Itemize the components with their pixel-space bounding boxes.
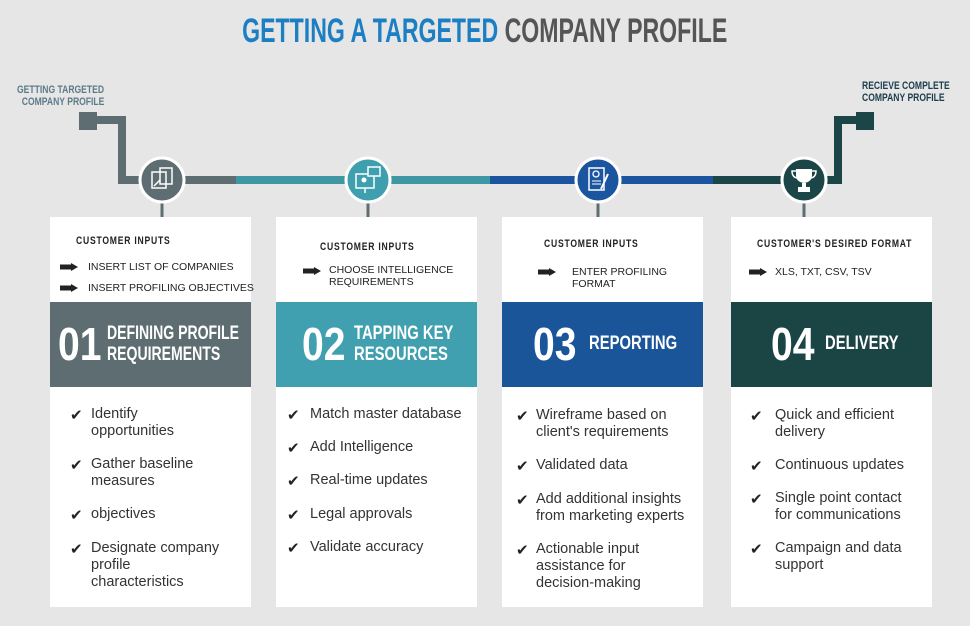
timeline xyxy=(79,112,874,217)
card 1 bullets: ✔ xyxy=(70,541,83,558)
card 2 bullets: Real-time updates xyxy=(310,472,428,488)
card 4 band: 04 xyxy=(771,318,814,370)
card 1 bullets: Designate company xyxy=(91,540,219,556)
card 3 bullets: decision-making xyxy=(536,575,641,591)
card 1 input items xyxy=(60,261,254,294)
panel: card 2 xyxy=(276,217,477,607)
card 2 bullets: Add Intelligence xyxy=(310,439,413,455)
card 4 format item: XLS, TXT, CSV, TSV xyxy=(775,266,872,278)
card 2 bullets xyxy=(287,406,462,557)
card 1 bullets: opportunities xyxy=(91,423,174,439)
card 3 bullets: Wireframe based on xyxy=(536,407,667,423)
panel: card 4 xyxy=(731,217,932,607)
card 3 band xyxy=(502,302,703,387)
title: GETTING A TARGETED COMPANY PROFILE xyxy=(242,12,728,50)
card 4 bullets xyxy=(750,407,904,573)
card 4 bullets: Campaign and data xyxy=(775,540,902,556)
card 4 bullets: ✔ xyxy=(750,408,763,425)
card 1 bullets: ✔ xyxy=(70,507,83,524)
card 1 input items: INSERT PROFILING OBJECTIVES xyxy=(88,282,254,294)
card 3 inputs title: CUSTOMER INPUTS xyxy=(544,238,638,250)
panel: card 3 xyxy=(502,217,703,607)
card 2 band: TAPPING KEY xyxy=(354,323,453,344)
card 3 bullets: ✔ xyxy=(516,458,529,475)
icon: step 4 trophy xyxy=(780,156,828,204)
card 4 bullets: Continuous updates xyxy=(775,457,904,473)
card 4 bullets: support xyxy=(775,557,823,573)
card 2 input item: REQUIREMENTS xyxy=(329,276,414,288)
panel: card 1 xyxy=(50,217,251,607)
end label: COMPANY PROFILE xyxy=(862,92,945,104)
card 4 bullets: Single point contact xyxy=(775,490,902,506)
card 4 bullets: ✔ xyxy=(750,458,763,475)
card 3 bullets: ✔ xyxy=(516,492,529,509)
card 4 format title: CUSTOMER'S DESIRED FORMAT xyxy=(757,238,912,250)
card 1 inputs title: CUSTOMER INPUTS xyxy=(76,235,170,247)
icon: step 1 xyxy=(138,156,186,204)
card 4 bullets: Quick and efficient xyxy=(775,407,894,423)
card 1 bullets: ✔ xyxy=(70,407,83,424)
start label xyxy=(17,84,104,108)
start label: GETTING TARGETED xyxy=(17,84,104,96)
card 3 bullets: ✔ xyxy=(516,542,529,559)
card 1 bullets: objectives xyxy=(91,506,155,522)
card 3 bullets: Validated data xyxy=(536,457,628,473)
card 1 input items: INSERT LIST OF COMPANIES xyxy=(88,261,234,273)
card 2 bullets: Validate accuracy xyxy=(310,539,423,555)
card 3 input item: FORMAT xyxy=(572,278,616,290)
end label xyxy=(862,80,950,104)
start label: COMPANY PROFILE xyxy=(22,96,104,108)
card 4 band: DELIVERY xyxy=(825,333,899,354)
end label: RECIEVE COMPLETE xyxy=(862,80,950,92)
card 2 band xyxy=(276,302,477,387)
icon: step 2 xyxy=(344,156,392,204)
card 3 input item: ENTER PROFILING xyxy=(572,266,667,278)
card 3 bullets: client's requirements xyxy=(536,424,669,440)
card 1 bullets: profile xyxy=(91,557,130,573)
card 3 band: 03 xyxy=(533,318,576,370)
card 1 bullets: measures xyxy=(91,473,155,489)
icon: step 3 xyxy=(574,156,622,204)
card 4 bullets: delivery xyxy=(775,424,825,440)
card 3 input item xyxy=(538,266,667,290)
card 2 bullets: ✔ xyxy=(287,407,300,424)
card 3 bullets: from marketing experts xyxy=(536,508,684,524)
card 1 band: 01 xyxy=(58,318,101,370)
card 3 bullets: assistance for xyxy=(536,558,625,574)
card 2 bullets: ✔ xyxy=(287,440,300,457)
card 1 band: REQUIREMENTS xyxy=(107,344,220,365)
card 4 bullets: ✔ xyxy=(750,541,763,558)
card 4 band xyxy=(731,302,932,387)
card 4 bullets: for communications xyxy=(775,507,901,523)
card 1 bullets xyxy=(70,406,220,590)
card 2 bullets: ✔ xyxy=(287,473,300,490)
card 1 band: DEFINING PROFILE xyxy=(107,323,239,344)
card 1 bullets: ✔ xyxy=(70,457,83,474)
card 2 inputs title: CUSTOMER INPUTS xyxy=(320,241,414,253)
card 2 band: 02 xyxy=(302,318,345,370)
card 3 bullets: Add additional insights xyxy=(536,491,681,507)
card 2 input item xyxy=(303,264,453,288)
card 2 bullets: ✔ xyxy=(287,540,300,557)
card 1 bullets: Identify xyxy=(91,406,138,422)
card 2 input item: CHOOSE INTELLIGENCE xyxy=(329,264,453,276)
card 2 bullets: ✔ xyxy=(287,507,300,524)
card 1 band xyxy=(50,302,251,387)
card 3 band: REPORTING xyxy=(589,333,677,354)
card 3 bullets xyxy=(516,407,684,591)
card 2 bullets: Match master database xyxy=(310,406,462,422)
card 4 bullets: ✔ xyxy=(750,491,763,508)
card 1 bullets: Gather baseline xyxy=(91,456,193,472)
card 3 bullets: ✔ xyxy=(516,408,529,425)
card 1 bullets: characteristics xyxy=(91,574,184,590)
card 2 bullets: Legal approvals xyxy=(310,506,412,522)
card 2 band: RESOURCES xyxy=(354,344,448,365)
card 3 bullets: Actionable input xyxy=(536,541,639,557)
